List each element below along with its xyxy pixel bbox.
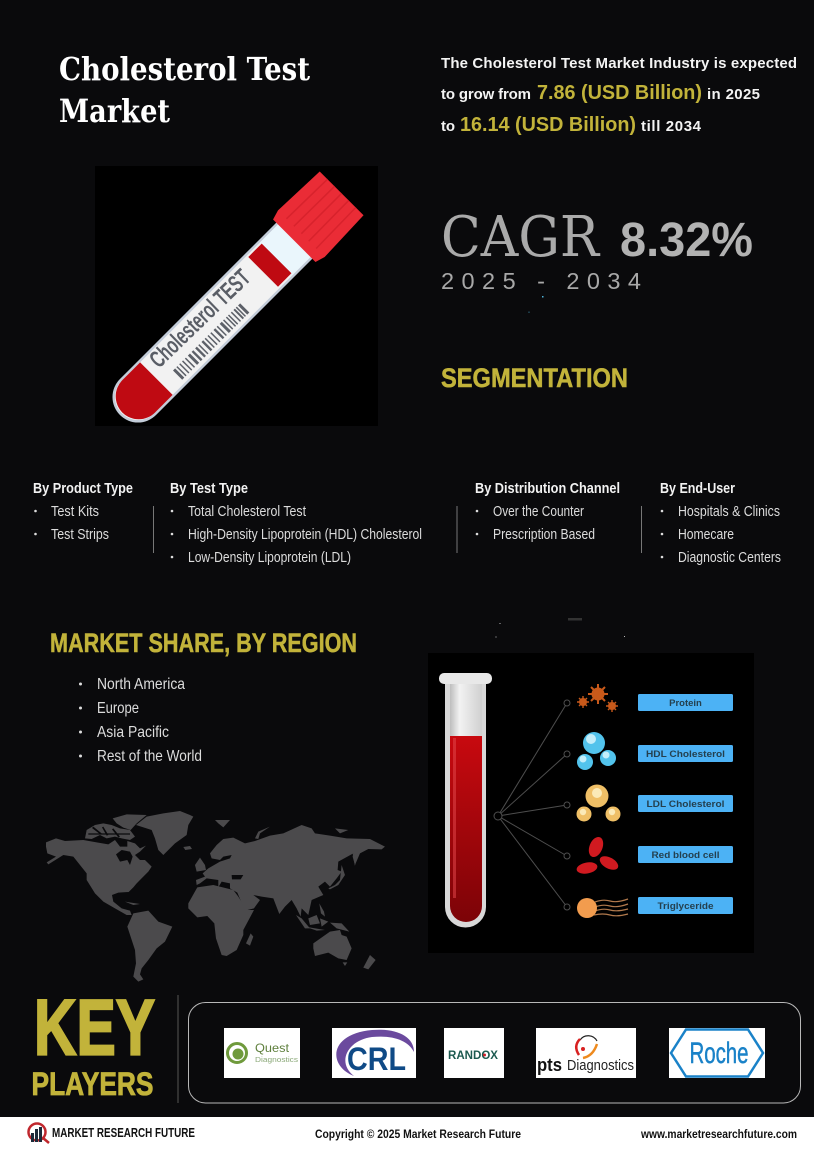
- segmentation: by end-user: Diagnostic Centers: [678, 550, 781, 566]
- label: LDL cholesterol: LDL Cholesterol: [646, 799, 724, 810]
- region list: Asia Pacific: [97, 724, 169, 741]
- heading: key players: [32, 982, 155, 1102]
- segmentation: by product type: [33, 481, 133, 543]
- market growth statement: to: [441, 118, 455, 135]
- connector lines: [494, 700, 570, 910]
- logo: Quest Diagnostics: Diagnostics: [255, 1055, 298, 1064]
- logo: pts Diagnostics: [536, 1028, 636, 1078]
- segmentation: by end-user: By End-User: [660, 481, 735, 497]
- title: [59, 50, 310, 130]
- segmentation: by distribution channel: By Distribution Channel: [475, 481, 620, 497]
- logo: pts Diagnostics: Diagnostics: [567, 1057, 634, 1074]
- copyright: Copyright © 2025 Market Research Future: [315, 1127, 521, 1141]
- heading: key players: KEY: [34, 982, 155, 1072]
- icon: red blood cells: [576, 835, 620, 875]
- market growth statement: 16.14 (USD Billion): [460, 114, 636, 136]
- logo: CRL: [332, 1028, 416, 1078]
- label: LDL cholesterol: [638, 795, 733, 812]
- label: HDL cholesterol: HDL Cholesterol: [646, 749, 725, 760]
- icon: market research future logo: [28, 1124, 49, 1143]
- heading: segmentation: SEGMENTATION: [441, 363, 628, 393]
- logo: Roche: [669, 1028, 765, 1078]
- icon: protein: [577, 684, 618, 712]
- region list: North America: [97, 676, 185, 693]
- label: triglyceride: Triglyceride: [658, 901, 714, 912]
- segmentation: by product type: Test Kits: [51, 504, 99, 520]
- label: red blood cell: Red blood cell: [652, 850, 720, 861]
- region list: [79, 676, 202, 765]
- barcode: [174, 304, 248, 379]
- market growth statement: in 2025: [707, 86, 760, 103]
- heading: key players: PLAYERS: [32, 1066, 154, 1102]
- market growth statement: to grow from: [441, 86, 531, 103]
- title: Market: [59, 92, 170, 130]
- segmentation: by test type: By Test Type: [170, 481, 248, 497]
- CAGR figure: 8.32%: [620, 214, 753, 267]
- CAGR figure: [441, 205, 753, 313]
- segmentation: by test type: Low-Density Lipoprotein (LDL): [188, 550, 351, 566]
- icon: LDL spheres: [576, 784, 620, 822]
- footer: [0, 1117, 814, 1150]
- panel: key player logos: [188, 1002, 800, 1103]
- illustration: cholesterol test tube: [95, 166, 378, 438]
- CAGR figure: CAGR: [441, 205, 601, 270]
- footer: MARKET RESEARCH FUTURE: [52, 1126, 195, 1140]
- market growth statement: till 2034: [641, 118, 702, 135]
- logo: Quest Diagnostics: [224, 1028, 300, 1078]
- segmentation: by distribution channel: Prescription Based: [493, 527, 595, 543]
- label: red blood cell: [638, 846, 733, 863]
- segmentation: by distribution channel: Over the Counter: [493, 504, 584, 520]
- test tube with blood: [439, 673, 492, 927]
- logo: Quest Diagnostics: Quest: [255, 1041, 290, 1055]
- logo: CRL: CRL: [347, 1041, 406, 1077]
- illustration: blood components diagram: [428, 653, 754, 953]
- market growth statement: [441, 55, 797, 136]
- label: protein: Protein: [669, 698, 702, 709]
- segmentation: by test type: High-Density Lipoprotein (HDL) Cholesterol: [188, 527, 422, 543]
- label: protein: [638, 694, 733, 711]
- segmentation: by product type: By Product Type: [33, 481, 133, 497]
- region list: Rest of the World: [97, 748, 202, 765]
- region list: Europe: [97, 700, 139, 717]
- icon: HDL spheres: [577, 732, 616, 770]
- segmentation: by test type: Total Cholesterol Test: [188, 504, 306, 520]
- segmentation: by test type: [170, 481, 422, 566]
- CAGR figure: 2025 - 2034: [441, 268, 641, 294]
- logo: Roche: Roche: [690, 1037, 748, 1070]
- logo: Randox: [444, 1028, 504, 1078]
- logo: pts Diagnostics: pts: [537, 1055, 562, 1075]
- logo: Randox: RANDOX: [448, 1048, 498, 1062]
- label: HDL cholesterol: [638, 745, 733, 762]
- segmentation: by distribution channel: [475, 481, 620, 543]
- label: triglyceride: [638, 897, 733, 914]
- segmentation: by end-user: Homecare: [678, 527, 734, 543]
- market growth statement: The Cholesterol Test Market Industry is expected: [441, 55, 797, 72]
- segmentation: by end-user: [660, 481, 781, 566]
- heading: market share by region: MARKET SHARE, BY REGION: [50, 628, 357, 658]
- icon: triglyceride: [577, 898, 628, 918]
- illustration: cholesterol test tube: Cholesterol TEST: [144, 264, 256, 373]
- segmentation: by end-user: Hospitals & Clinics: [678, 504, 780, 520]
- segmentation: by product type: Test Strips: [51, 527, 109, 543]
- title: Cholesterol Test: [59, 50, 310, 88]
- world map: [46, 811, 385, 982]
- market growth statement: 7.86 (USD Billion): [537, 82, 702, 104]
